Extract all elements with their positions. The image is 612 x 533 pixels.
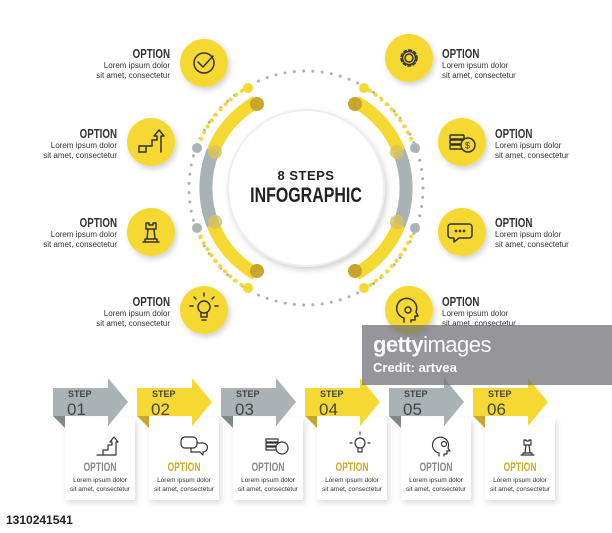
text: sit amet, consectetur: [43, 240, 117, 249]
step 03: OPTION: [251, 462, 285, 474]
step 05: [389, 378, 476, 506]
step 04: OPTION: [335, 462, 369, 474]
title: INFOGRAPHIC: [250, 184, 362, 207]
watermark band: [362, 325, 612, 385]
step 02: sit amet, consectetur: [154, 486, 214, 493]
text: OPTION: [80, 126, 117, 141]
step 01: 01: [67, 400, 86, 419]
option texts right: OPTION: [442, 46, 479, 61]
icon: head gear: [397, 298, 418, 322]
text: OPTION: [133, 294, 170, 309]
step 02: Lorem ipsum dolor: [157, 477, 211, 484]
text: Lorem ipsum dolor: [104, 309, 170, 318]
step 06: [473, 378, 560, 506]
icon: coins: $: [465, 140, 470, 150]
step 03: 03: [235, 400, 254, 419]
step 01: Lorem ipsum dolor: [73, 477, 127, 484]
text: Lorem ipsum dolor: [51, 141, 117, 150]
icon: chart: [139, 130, 164, 152]
step 01: [53, 378, 140, 506]
step 01: sit amet, consectetur: [70, 486, 130, 493]
id footer: [0, 506, 612, 533]
title: [250, 168, 362, 207]
arcs: [206, 102, 406, 274]
text: OPTION: [442, 294, 479, 309]
text: OPTION: [495, 215, 532, 230]
step 06: 06: [487, 400, 506, 419]
icon: chat: [448, 224, 472, 242]
text: Lorem ipsum dolor: [442, 309, 508, 318]
step 05: OPTION: [419, 462, 453, 474]
option texts left: [96, 46, 170, 80]
step 06: OPTION: [503, 462, 537, 474]
step 02: STEP: [152, 389, 176, 399]
icon: check: [194, 53, 214, 73]
step 06: Lorem ipsum dolor: [493, 477, 547, 484]
text: Lorem ipsum dolor: [495, 230, 561, 239]
step 04: 04: [319, 400, 338, 419]
step 05: Lorem ipsum dolor: [409, 477, 463, 484]
icon: rook: [143, 223, 159, 242]
option texts left: sit amet, consectetur: [96, 71, 170, 80]
step 04: STEP: [320, 389, 344, 399]
dotted ring: [189, 71, 423, 305]
option texts right: Lorem ipsum dolor: [442, 61, 508, 70]
option texts left: Lorem ipsum dolor: [104, 61, 170, 70]
watermark band: gettyimages: [373, 332, 491, 357]
step 01: OPTION: [83, 462, 117, 474]
step 04: Lorem ipsum dolor: [325, 477, 379, 484]
id footer: 1310241541: [6, 513, 73, 527]
text: sit amet, consectetur: [96, 319, 170, 328]
option texts left: OPTION: [133, 46, 170, 61]
watermark band: Credit: artvea: [373, 360, 457, 375]
text: Lorem ipsum dolor: [51, 230, 117, 239]
text: sit amet, consectetur: [442, 319, 516, 328]
step 03: [221, 378, 308, 506]
step 03: sit amet, consectetur: [238, 486, 298, 493]
step 05: 05: [403, 400, 422, 419]
text: sit amet, consectetur: [495, 240, 569, 249]
title: 8 STEPS: [278, 168, 334, 183]
step 05: STEP: [404, 389, 428, 399]
step 04: sit amet, consectetur: [322, 486, 382, 493]
step 01: STEP: [68, 389, 92, 399]
icon: gear: [401, 50, 417, 66]
text: OPTION: [80, 215, 117, 230]
option texts right: [442, 46, 516, 80]
step 06: sit amet, consectetur: [490, 486, 550, 493]
text: sit amet, consectetur: [43, 151, 117, 160]
step 06: STEP: [488, 389, 512, 399]
step 02: 02: [151, 400, 170, 419]
text: Lorem ipsum dolor: [495, 141, 561, 150]
icon: coins: [450, 135, 475, 152]
step 02: [137, 378, 224, 506]
text: OPTION: [495, 126, 532, 141]
icon: bulb: [190, 293, 218, 320]
step 04: [305, 378, 392, 506]
step 05: sit amet, consectetur: [406, 486, 466, 493]
option texts right: sit amet, consectetur: [442, 71, 516, 80]
step 02: OPTION: [167, 462, 201, 474]
step 03: STEP: [236, 389, 260, 399]
text: sit amet, consectetur: [495, 151, 569, 160]
step 03: Lorem ipsum dolor: [241, 477, 295, 484]
